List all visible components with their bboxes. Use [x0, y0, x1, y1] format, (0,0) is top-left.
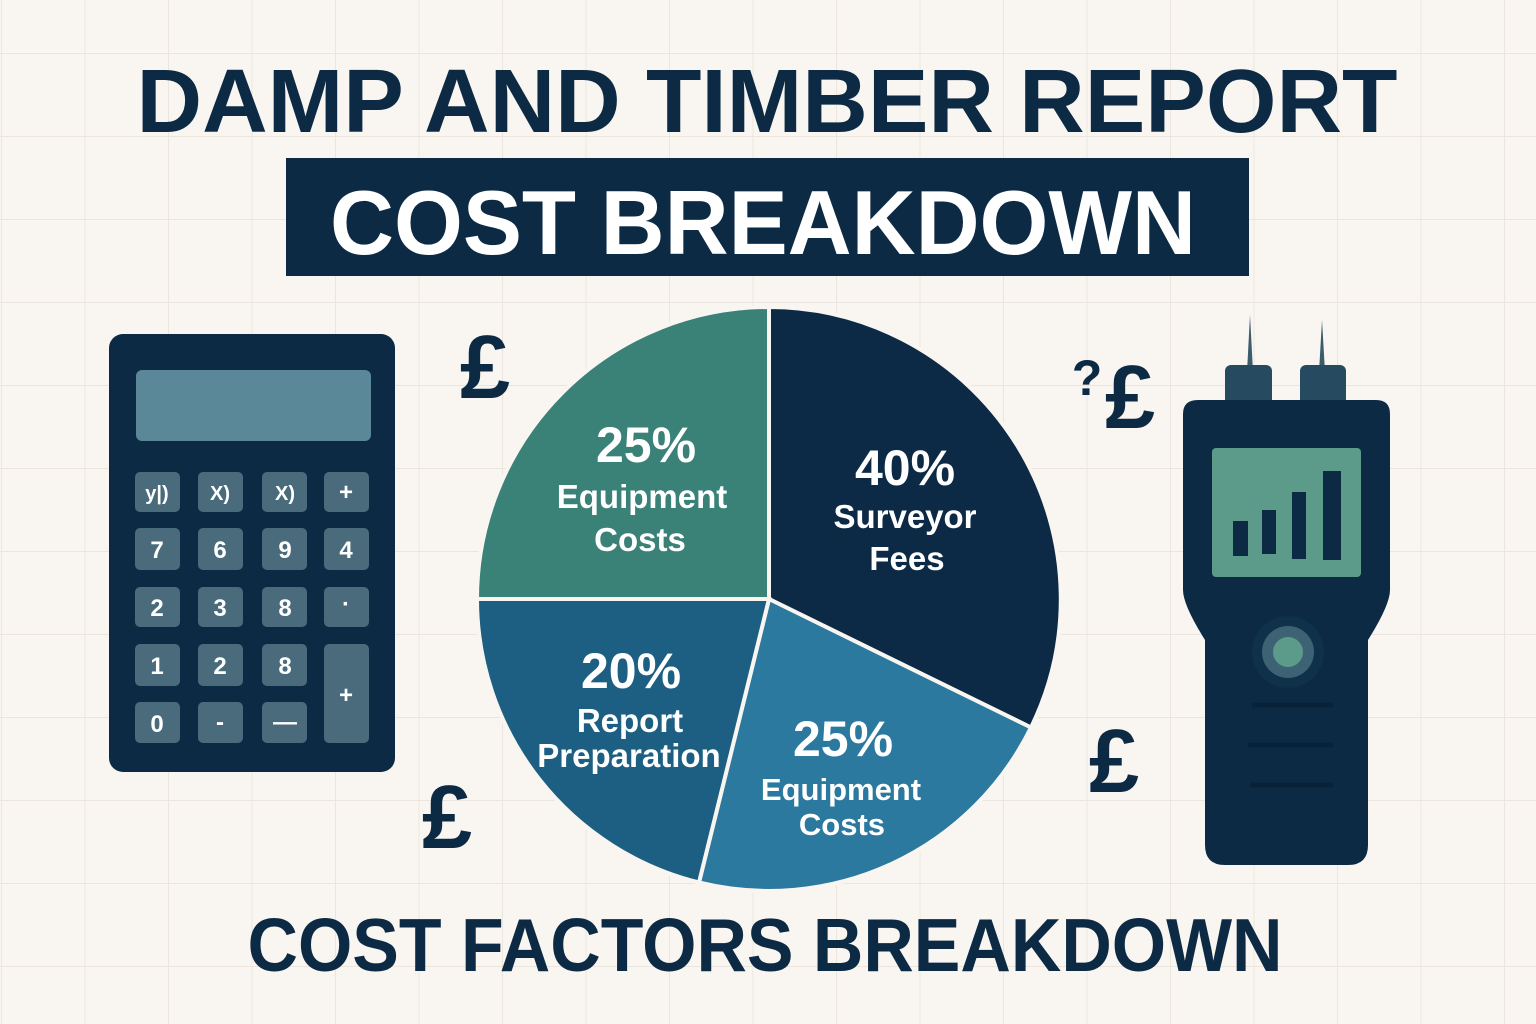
- icon: moisture meter: [1183, 315, 1390, 865]
- slice: surveyor fees: [769, 307, 1061, 728]
- icon: calculator: 2: [213, 653, 227, 680]
- icon: calculator: 1: [150, 653, 164, 680]
- icon: calculator: 7: [150, 537, 164, 564]
- label: 20% report: 20%: [581, 643, 681, 699]
- label: 25% equipment top: 25%: [596, 417, 696, 473]
- label: 40% surveyor: 40%: [855, 440, 955, 496]
- icon: calculator: 3: [213, 595, 227, 622]
- icon: calculator: 8: [278, 653, 292, 680]
- label: 20% report: Preparation: [537, 737, 721, 774]
- slice: report preparation: [477, 599, 769, 882]
- icon: calculator: y|): [145, 483, 169, 505]
- icon: calculator: 4: [339, 537, 353, 564]
- icon: calculator: X): [210, 483, 230, 505]
- icon: calculator: [109, 334, 395, 772]
- icon: calculator: 9: [278, 537, 292, 564]
- label: 20% report: Report: [577, 702, 683, 739]
- icon: pound signs: £: [1105, 348, 1155, 448]
- icon: calculator: 6: [213, 537, 227, 564]
- icon: pound signs: £: [422, 768, 472, 868]
- pie chart: [477, 307, 1061, 891]
- slice: equipment costs top: [477, 307, 769, 599]
- slice: equipment costs bottom: [699, 599, 1031, 891]
- icon: calculator: +: [339, 479, 353, 506]
- label: 25% equipment top: Equipment: [557, 478, 727, 515]
- icon: pound signs: £: [460, 318, 510, 418]
- label: 25% equipment bottom: 25%: [793, 711, 893, 767]
- icon: pound signs: ?: [1072, 350, 1102, 406]
- icon: calculator: X): [275, 483, 295, 505]
- label: 25% equipment bottom: [761, 711, 921, 842]
- icon: calculator: +: [339, 682, 353, 709]
- icon: calculator: ·: [342, 591, 350, 618]
- icon: calculator: —: [273, 709, 297, 736]
- subtitle banner: COST BREAKDOWN: [330, 173, 1196, 274]
- label: 25% equipment bottom: Equipment: [761, 772, 921, 807]
- label: 40% surveyor: Surveyor: [833, 498, 977, 535]
- icon: pound signs: £: [1089, 712, 1139, 812]
- footer heading: COST FACTORS BREAKDOWN: [248, 903, 1282, 987]
- label: 40% surveyor: [833, 440, 977, 577]
- icon: calculator: 2: [150, 595, 164, 622]
- label: 40% surveyor: Fees: [869, 540, 945, 577]
- label: 25% equipment top: Costs: [594, 521, 686, 558]
- icon: calculator: -: [216, 709, 224, 736]
- label: 25% equipment top: [557, 417, 727, 558]
- icon: pound signs: [422, 318, 1155, 868]
- icon: calculator: 0: [150, 711, 164, 738]
- title: DAMP AND TIMBER REPORT: [136, 52, 1398, 152]
- label: 25% equipment bottom: Costs: [799, 807, 885, 842]
- label: 20% report: [537, 643, 721, 774]
- icon: calculator: 8: [278, 595, 292, 622]
